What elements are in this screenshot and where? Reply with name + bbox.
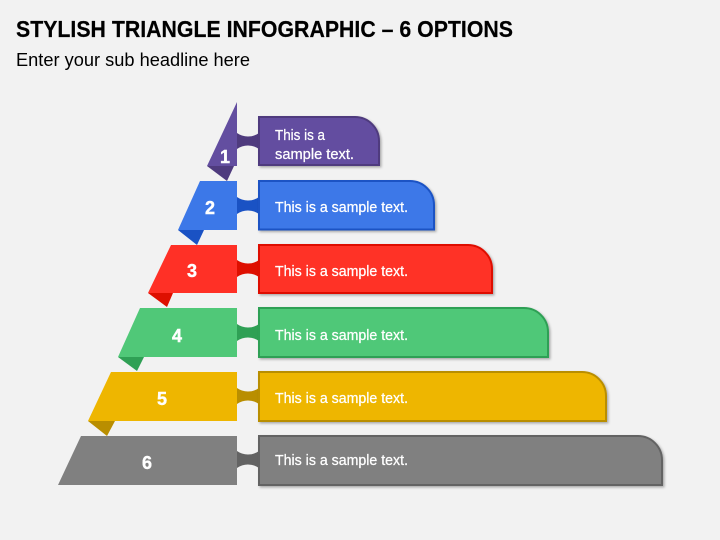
- fold 5: [88, 421, 115, 436]
- tier 1: purple: [207, 102, 379, 181]
- label 1: This is a: [275, 128, 326, 144]
- number 1: 1: [220, 147, 230, 167]
- segment 6: [58, 436, 237, 485]
- number 3: 3: [187, 261, 197, 281]
- label 3: This is a sample text.: [275, 264, 408, 280]
- number 2: 2: [205, 198, 215, 218]
- label 4: This is a sample text.: [275, 328, 408, 344]
- connector 1: [237, 133, 259, 149]
- label 1: sample text.: [275, 147, 354, 163]
- segment 5: [88, 372, 237, 421]
- number 6: 6: [142, 453, 152, 473]
- box 2: [259, 181, 434, 230]
- tier 3: red: [148, 245, 492, 307]
- label 2: This is a sample text.: [275, 200, 408, 216]
- segment 4: [118, 308, 237, 357]
- box 5: [259, 372, 606, 421]
- connector 3: [237, 260, 259, 277]
- connector 4: [237, 324, 259, 341]
- box 6: [259, 436, 662, 485]
- segment 1: [207, 102, 237, 166]
- box 4: [259, 308, 548, 357]
- connector 2: [237, 197, 259, 214]
- segment 3: [148, 245, 237, 293]
- fold 4: [118, 357, 144, 371]
- tier 6: gray: [58, 436, 662, 485]
- connector 6: [237, 451, 259, 468]
- connector 5: [237, 388, 259, 404]
- fold 2: [178, 230, 204, 245]
- segment 2: [178, 181, 237, 230]
- title: STYLISH TRIANGLE INFOGRAPHIC – 6 OPTIONS: [16, 16, 513, 42]
- box 3: [259, 245, 492, 293]
- number 5: 5: [157, 389, 167, 409]
- label 1: [275, 128, 354, 163]
- tier 5: yellow: [88, 372, 606, 436]
- fold 1: [207, 166, 234, 181]
- label 6: This is a sample text.: [275, 453, 408, 469]
- tier 4: green: [118, 308, 548, 371]
- box 1: [259, 117, 379, 165]
- label 5: This is a sample text.: [275, 391, 408, 407]
- tier 2: blue: [178, 181, 434, 245]
- subtitle: Enter your sub headline here: [16, 50, 250, 70]
- number 4: 4: [172, 326, 182, 346]
- fold 3: [148, 293, 173, 307]
